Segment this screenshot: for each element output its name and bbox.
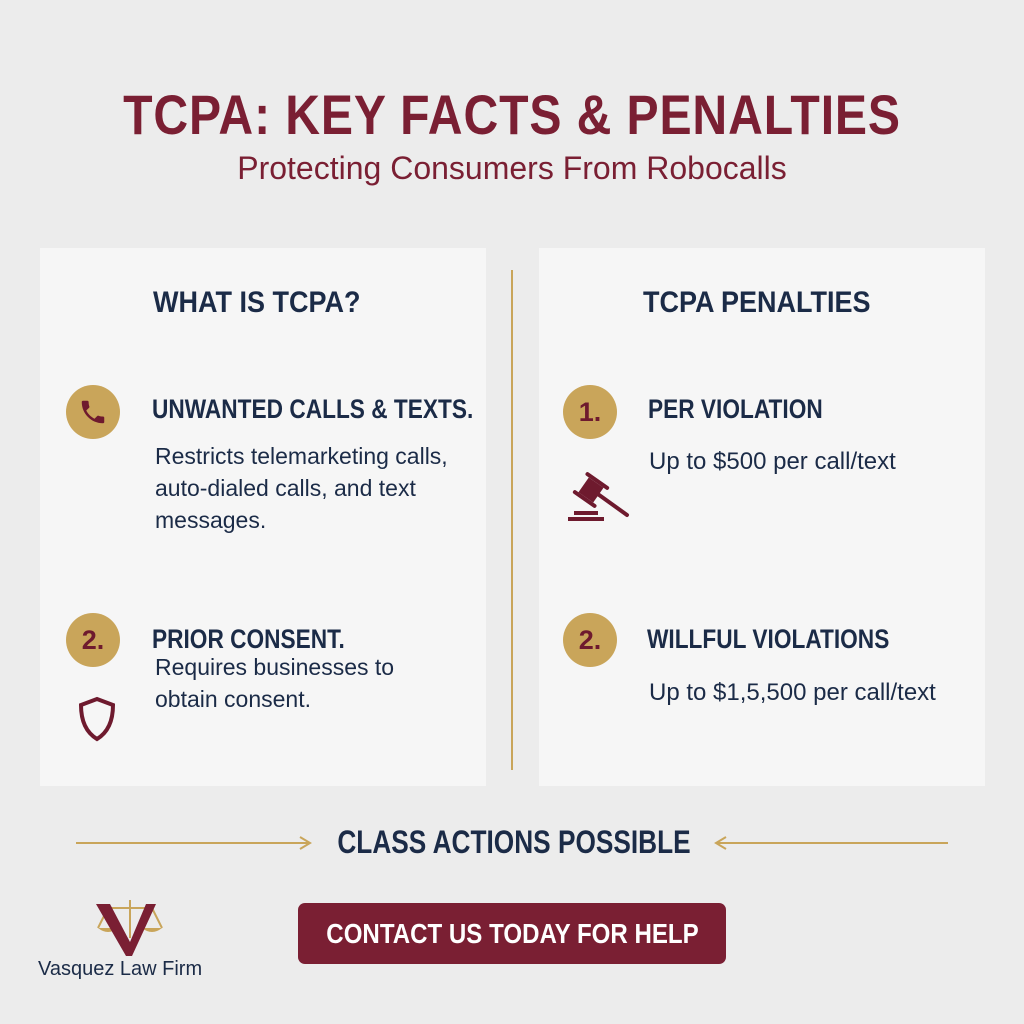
item body: Requires businesses to obtain consent.	[155, 654, 394, 712]
badge 2: 2.	[82, 624, 104, 654]
logo text: Vasquez Law Firm	[38, 958, 202, 980]
icon: shield	[79, 696, 115, 742]
badge 1: 1.	[579, 396, 601, 426]
button: contact	[298, 903, 726, 964]
logo	[38, 900, 202, 980]
icon: phone	[66, 385, 120, 439]
subtitle: Protecting Consumers From Robocalls	[237, 150, 787, 186]
logo mark	[96, 900, 163, 956]
item heading: WILLFUL VIOLATIONS	[647, 624, 889, 654]
panel: what is tcpa	[40, 248, 486, 786]
item body: Restricts telemarketing calls, auto-dialed calls, and text messages.	[155, 443, 448, 533]
title: TCPA: KEY FACTS & PENALTIES	[123, 83, 901, 146]
item body: Up to $500 per call/text	[649, 448, 896, 475]
panel: penalties	[539, 248, 985, 786]
badge 2	[563, 613, 617, 667]
heading: WHAT IS TCPA?	[153, 286, 360, 319]
divider line	[511, 270, 513, 770]
arrow right	[714, 836, 948, 850]
item heading: PER VIOLATION	[648, 394, 823, 424]
badge 2	[66, 613, 120, 667]
item body: Up to $1,5,500 per call/text	[649, 679, 936, 706]
item heading: UNWANTED CALLS & TEXTS.	[152, 394, 473, 424]
item heading: PRIOR CONSENT.	[152, 624, 345, 654]
heading: TCPA PENALTIES	[643, 286, 871, 319]
button text: CONTACT US TODAY FOR HELP	[326, 918, 698, 948]
arrow left	[76, 836, 312, 850]
badge 2: 2.	[579, 624, 601, 654]
class actions text: CLASS ACTIONS POSSIBLE	[337, 824, 691, 860]
icon: gavel	[568, 472, 630, 521]
badge 1	[563, 385, 617, 439]
